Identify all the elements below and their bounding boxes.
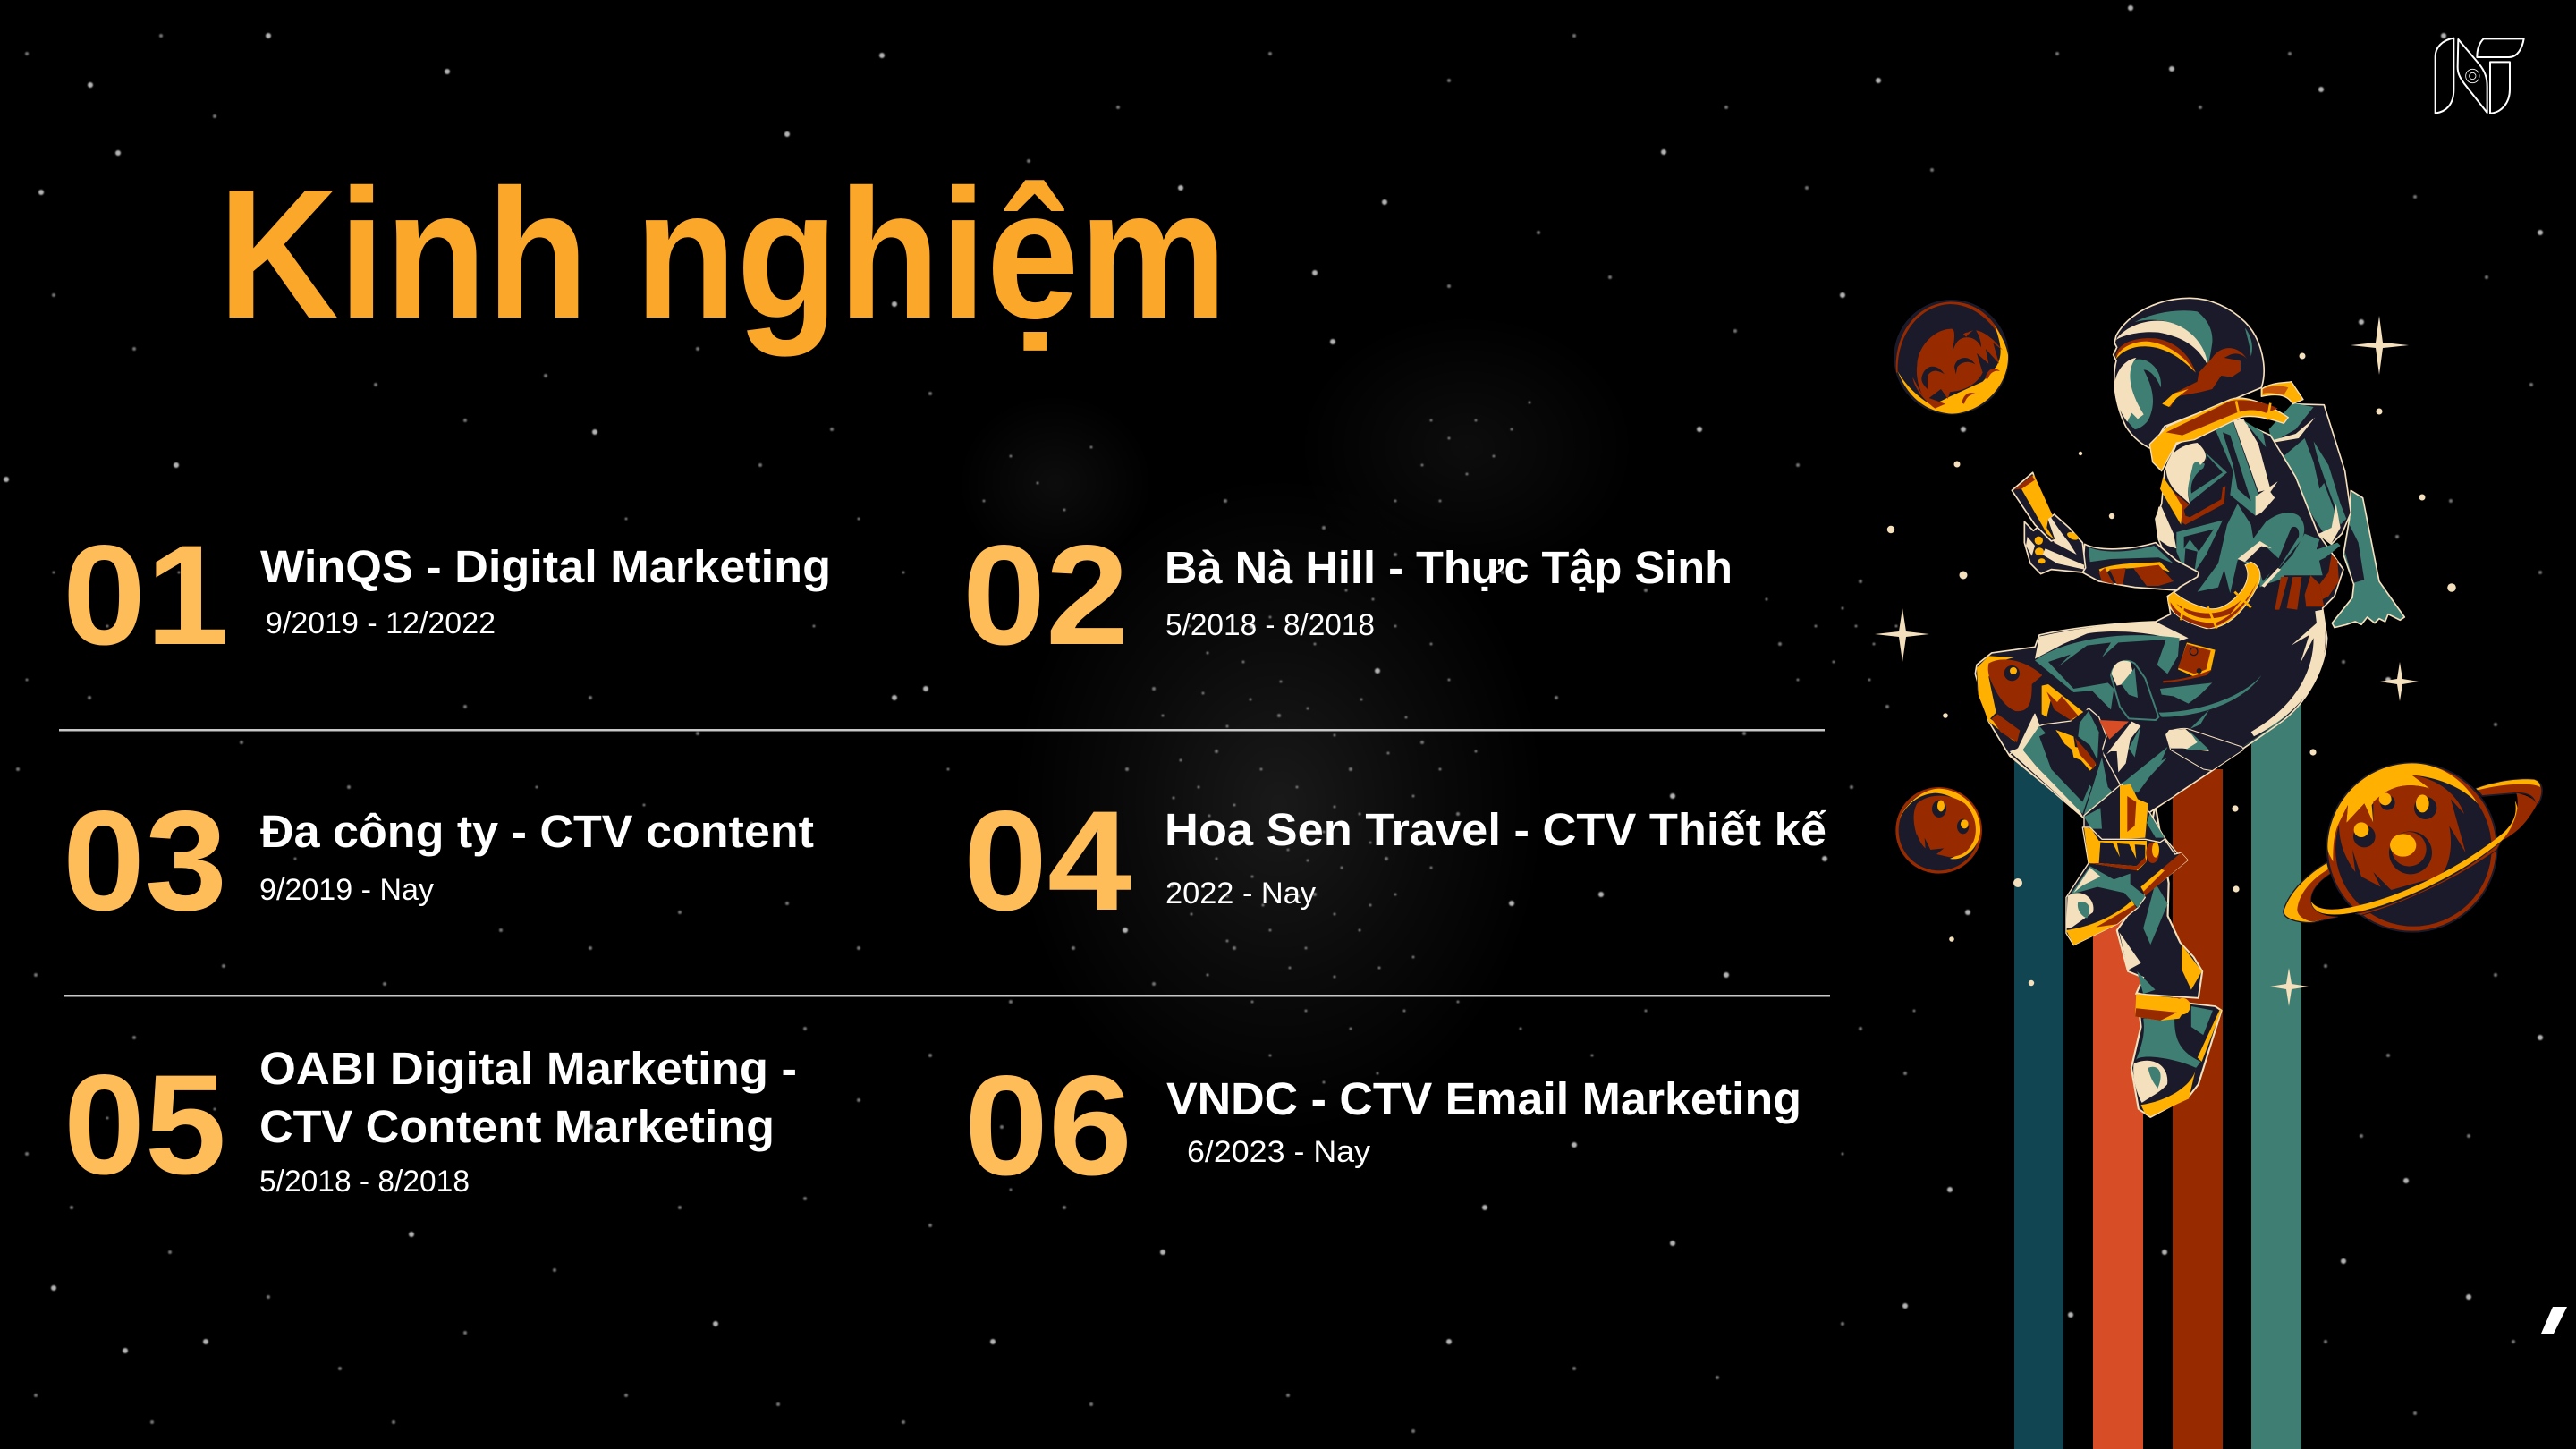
astronaut: hip straps bbox=[2275, 575, 2324, 610]
astronaut: back band bbox=[2310, 543, 2341, 562]
saturn ring back bbox=[2476, 779, 2542, 805]
planet: small moon bbox=[1897, 789, 1980, 872]
number 04: 04 bbox=[963, 781, 1131, 940]
date 01: 9/2019 - 12/2022 bbox=[266, 606, 496, 640]
astronaut: forearm pad rust bbox=[2099, 565, 2174, 586]
astronaut: shoulder shadow bbox=[2191, 456, 2223, 494]
astronaut: lower torso teal bbox=[2266, 534, 2323, 584]
astronaut: shoulder yellow bbox=[2160, 477, 2182, 525]
divider line 2 bbox=[64, 995, 1830, 996]
number 06: 06 bbox=[964, 1046, 1132, 1205]
astronaut: forearm pad yellow bbox=[2099, 562, 2171, 575]
divider line 1 bbox=[59, 729, 1825, 732]
job title 05: OABI Digital Marketing - bbox=[259, 1043, 797, 1094]
colored vertical stripes bbox=[2014, 701, 2301, 1449]
astronaut: cuff cream edge bbox=[2238, 541, 2281, 588]
astronaut: fingers cream bbox=[2026, 516, 2084, 570]
astronaut: belly shade bbox=[2184, 530, 2214, 552]
experience item 06 bbox=[964, 1046, 1801, 1205]
astronaut: body cream side bbox=[2251, 610, 2326, 736]
astronaut: neck hose rust bbox=[2166, 400, 2278, 436]
astronaut: forearm teal bbox=[2089, 546, 2174, 564]
job title 03: Đa công ty - CTV content bbox=[260, 806, 814, 857]
planet: saturn bbox=[2284, 763, 2542, 932]
astronaut: fringes bbox=[2256, 481, 2278, 516]
saturn craters bbox=[2353, 792, 2436, 874]
astronaut: hose rings bbox=[2236, 401, 2270, 419]
background: nebula glow bbox=[957, 313, 1637, 1136]
experience item 02 bbox=[962, 515, 1733, 674]
astronaut: headset bbox=[2162, 348, 2248, 407]
astronaut: side cream bbox=[2156, 507, 2176, 548]
job title 06: VNDC - CTV Email Marketing bbox=[1166, 1073, 1801, 1124]
experience item 01 bbox=[63, 515, 831, 674]
astronaut: torso teal right bbox=[2198, 504, 2254, 593]
experience item 03 bbox=[63, 781, 814, 940]
job title 01: WinQS - Digital Marketing bbox=[260, 541, 831, 592]
date 02: 5/2018 - 8/2018 bbox=[1165, 608, 1375, 642]
astronaut: helmet cream sheen bbox=[2116, 321, 2207, 365]
date 05: 5/2018 - 8/2018 bbox=[259, 1165, 470, 1199]
number 05: 05 bbox=[64, 1045, 226, 1204]
date 06: 6/2023 - Nay bbox=[1187, 1135, 1370, 1169]
astronaut: torso, arm, helmet bbox=[2012, 298, 2341, 736]
number 01: 01 bbox=[63, 515, 229, 674]
astronaut: forearm bbox=[2082, 543, 2199, 590]
experience item 05 bbox=[64, 1043, 797, 1204]
astronaut: helmet bbox=[2114, 298, 2264, 449]
date 04: 2022 - Nay bbox=[1165, 877, 1316, 911]
astronaut: back arm, backpack and body silhouette bbox=[1975, 403, 2404, 823]
astronaut: helmet side streak bbox=[2245, 328, 2252, 356]
number 02: 02 bbox=[962, 515, 1129, 674]
astronaut: visor teal bbox=[2115, 360, 2161, 429]
saturn sun-lit crescent bbox=[2327, 763, 2478, 861]
astronaut: back pouch bbox=[2319, 555, 2339, 599]
title: Kinh nghiệm bbox=[218, 151, 1227, 357]
astronaut: cuff bbox=[2243, 543, 2281, 581]
astronaut: belt rings bbox=[2181, 592, 2251, 629]
astronaut: chest strap shadow bbox=[2223, 432, 2251, 501]
saturn dark hemisphere bbox=[2335, 770, 2492, 927]
astronaut: visor cream bbox=[2114, 358, 2144, 422]
astronaut: chest strap cream bbox=[2233, 419, 2270, 492]
astronaut: helmet rust band bbox=[2115, 338, 2196, 373]
saturn sphere bbox=[2327, 763, 2497, 932]
astronaut: neck hose bbox=[2149, 398, 2288, 471]
astronaut: helmet yellow band bbox=[2116, 342, 2196, 373]
astronaut: upper hose bbox=[2261, 382, 2303, 404]
logo: NT monogram bbox=[2436, 38, 2524, 114]
saturn ring front rust bbox=[2355, 841, 2502, 915]
saturn ring left tip bbox=[2284, 862, 2337, 923]
saturn ring left tip rust bbox=[2297, 869, 2337, 922]
date 03: 9/2019 - Nay bbox=[259, 873, 434, 907]
astronaut: shoulder teal bbox=[2188, 453, 2227, 503]
astronaut: belt rust mid bbox=[2176, 599, 2242, 618]
job title 04: Hoa Sen Travel - CTV Thiết kế bbox=[1165, 804, 1827, 855]
astronaut: strap right teal bbox=[2243, 420, 2272, 477]
astronaut: shoulder rust bbox=[2162, 477, 2225, 525]
astronaut: belly teal bbox=[2176, 521, 2223, 572]
job title 02: Bà Nà Hill - Thực Tập Sinh bbox=[1165, 542, 1733, 593]
astronaut: chest strap teal bbox=[2216, 422, 2258, 516]
corner slash mark bbox=[2541, 1307, 2567, 1334]
astronaut: legs, knee and front boot bbox=[1977, 622, 2314, 945]
saturn ring highlight bbox=[2476, 779, 2540, 790]
astronaut: phone top bbox=[2014, 476, 2035, 489]
experience item 04 bbox=[963, 781, 1827, 940]
astronaut: helmet teal sheen bbox=[2135, 310, 2212, 365]
astronaut: belt rust bbox=[2171, 581, 2257, 629]
cream dots around astronaut bbox=[1887, 352, 2456, 986]
astronaut: upper hose shade bbox=[2263, 386, 2288, 395]
number 03: 03 bbox=[63, 781, 227, 940]
sparkle stars bbox=[1875, 316, 2419, 1006]
job title 05 line 2: CTV Content Marketing bbox=[259, 1101, 775, 1152]
astronaut: shoulder inner bbox=[2184, 487, 2223, 517]
planet: top moon bbox=[1894, 301, 2008, 414]
rear shin and rear boot of astronaut bbox=[2117, 805, 2222, 1117]
saturn ring right rim bbox=[2502, 793, 2537, 841]
astronaut: tucked arm bbox=[2239, 513, 2304, 588]
saturn rust surface bbox=[2339, 775, 2466, 890]
astronaut: belt bbox=[2168, 562, 2260, 629]
astronaut: finger tips bbox=[2035, 530, 2080, 564]
saturn ring front yellow bbox=[2310, 801, 2518, 914]
astronaut: hand bbox=[2024, 514, 2086, 574]
astronaut: tucked arm shade bbox=[2266, 527, 2299, 580]
astronaut: phone screen bbox=[2021, 475, 2055, 539]
astronaut: headset tip bbox=[2162, 389, 2189, 407]
astronaut: phone bbox=[2012, 472, 2055, 541]
astronaut: shoulder cream bbox=[2166, 443, 2206, 504]
